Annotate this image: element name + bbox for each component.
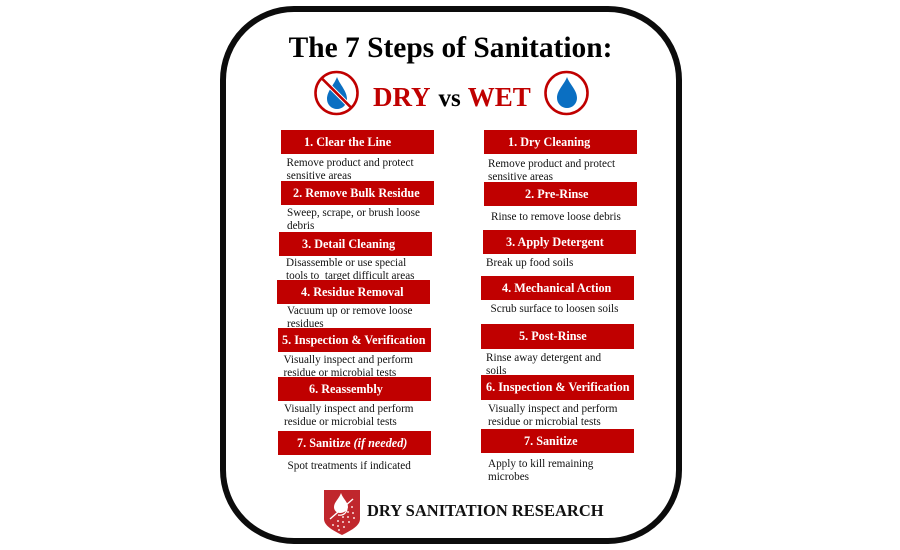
wet step 5 text: Rinse away detergent and bbox=[486, 352, 601, 364]
dry step 4 text: residues bbox=[287, 318, 324, 330]
dry step 7 text: Spot treatments if indicated bbox=[288, 460, 411, 472]
wet step 5 text: soils bbox=[486, 365, 507, 377]
wet step 1 heading bbox=[484, 130, 636, 154]
icon: water drop bbox=[544, 70, 589, 116]
wet step 3 heading bbox=[483, 230, 636, 254]
dry step 6 text: Visually inspect and perform bbox=[284, 403, 414, 415]
dry step 1 heading bbox=[281, 130, 434, 154]
dry step 5 heading bbox=[278, 328, 430, 352]
wet step 4 heading: 4. Mechanical Action bbox=[502, 281, 611, 295]
wet step 6 text bbox=[488, 403, 618, 428]
wet step 6 text: residue or microbial tests bbox=[488, 416, 601, 428]
dry step 2 text: debris bbox=[287, 220, 314, 232]
dry step 5 text: Visually inspect and perform bbox=[284, 354, 413, 366]
wet step 6 text: Visually inspect and perform bbox=[488, 403, 618, 415]
icon: crossed-out water drop bbox=[314, 70, 359, 116]
dry step 1 text: Remove product and protect bbox=[286, 157, 414, 169]
wet step 5 text bbox=[486, 352, 601, 377]
panel: wet steps bbox=[481, 130, 637, 483]
dry step 3 text: tools to target difficult areas bbox=[286, 270, 415, 282]
wet step 7 text: Apply to kill remaining bbox=[488, 458, 593, 470]
panel: dry steps bbox=[277, 130, 434, 472]
dry step 3 text bbox=[286, 257, 415, 282]
wet step 2 heading bbox=[484, 182, 636, 206]
dry step 1 text bbox=[286, 157, 414, 182]
wet step 7 heading bbox=[481, 429, 634, 453]
dry step 3 text: Disassemble or use special bbox=[286, 257, 406, 269]
dry step 4 text: Vacuum up or remove loose bbox=[287, 305, 413, 317]
dry step 5 text: residue or microbial tests bbox=[284, 367, 396, 379]
wet step 3 text: Break up food soils bbox=[486, 257, 573, 269]
wet step 5 heading bbox=[481, 324, 634, 349]
dry step 6 text: residue or microbial tests bbox=[284, 416, 397, 428]
rounded frame bbox=[220, 6, 682, 544]
wet step 2 heading: 2. Pre-Rinse bbox=[525, 187, 588, 201]
comparison heading: DRY vs WET bbox=[373, 82, 531, 112]
dry step 6 text bbox=[284, 403, 414, 428]
dry step 4 text bbox=[287, 305, 413, 330]
wet step 5 heading: 5. Post-Rinse bbox=[519, 329, 587, 343]
wet step 7 text: microbes bbox=[488, 471, 529, 483]
dry step 7 heading: 7. Sanitize (if needed) bbox=[297, 436, 407, 450]
wet step 1 text bbox=[488, 158, 616, 183]
dry step 6 heading: 6. Reassembly bbox=[309, 382, 383, 396]
wet step 1 heading: 1. Dry Cleaning bbox=[508, 135, 590, 149]
wet step 2 text: Rinse to remove loose debris bbox=[491, 211, 621, 223]
wet step 7 heading: 7. Sanitize bbox=[524, 434, 578, 448]
wet step 3 heading: 3. Apply Detergent bbox=[506, 235, 604, 249]
dry step 4 heading bbox=[277, 280, 430, 304]
title: The 7 Steps of Sanitation: bbox=[289, 32, 612, 64]
dry step 5 text bbox=[284, 354, 413, 379]
dry step 1 text: sensitive areas bbox=[286, 170, 351, 182]
dry step 3 heading: 3. Detail Cleaning bbox=[302, 237, 395, 251]
dry step 6 heading bbox=[278, 377, 430, 401]
icon: shield logo bbox=[324, 490, 360, 535]
wet step 6 heading bbox=[481, 375, 634, 400]
wet step 1 text: sensitive areas bbox=[488, 171, 553, 183]
wet step 7 text bbox=[488, 458, 594, 483]
dry step 2 heading: 2. Remove Bulk Residue bbox=[293, 186, 420, 200]
wet step 4 heading bbox=[481, 276, 634, 300]
dry step 3 heading bbox=[279, 232, 432, 256]
dry step 2 text bbox=[287, 207, 420, 232]
dry step 2 heading bbox=[281, 181, 434, 205]
organisation name: DRY SANITATION RESEARCH bbox=[367, 501, 604, 520]
dry step 1 heading: 1. Clear the Line bbox=[304, 135, 391, 149]
dry step 5 heading: 5. Inspection & Verification bbox=[282, 333, 426, 347]
dry step 7 heading bbox=[278, 431, 430, 455]
wet step 6 heading: 6. Inspection & Verification bbox=[486, 380, 630, 394]
dry step 4 heading: 4. Residue Removal bbox=[301, 285, 404, 299]
wet step 4 text: Scrub surface to loosen soils bbox=[490, 303, 619, 315]
wet step 1 text: Remove product and protect bbox=[488, 158, 615, 170]
dry step 2 text: Sweep, scrape, or brush loose bbox=[287, 207, 420, 219]
